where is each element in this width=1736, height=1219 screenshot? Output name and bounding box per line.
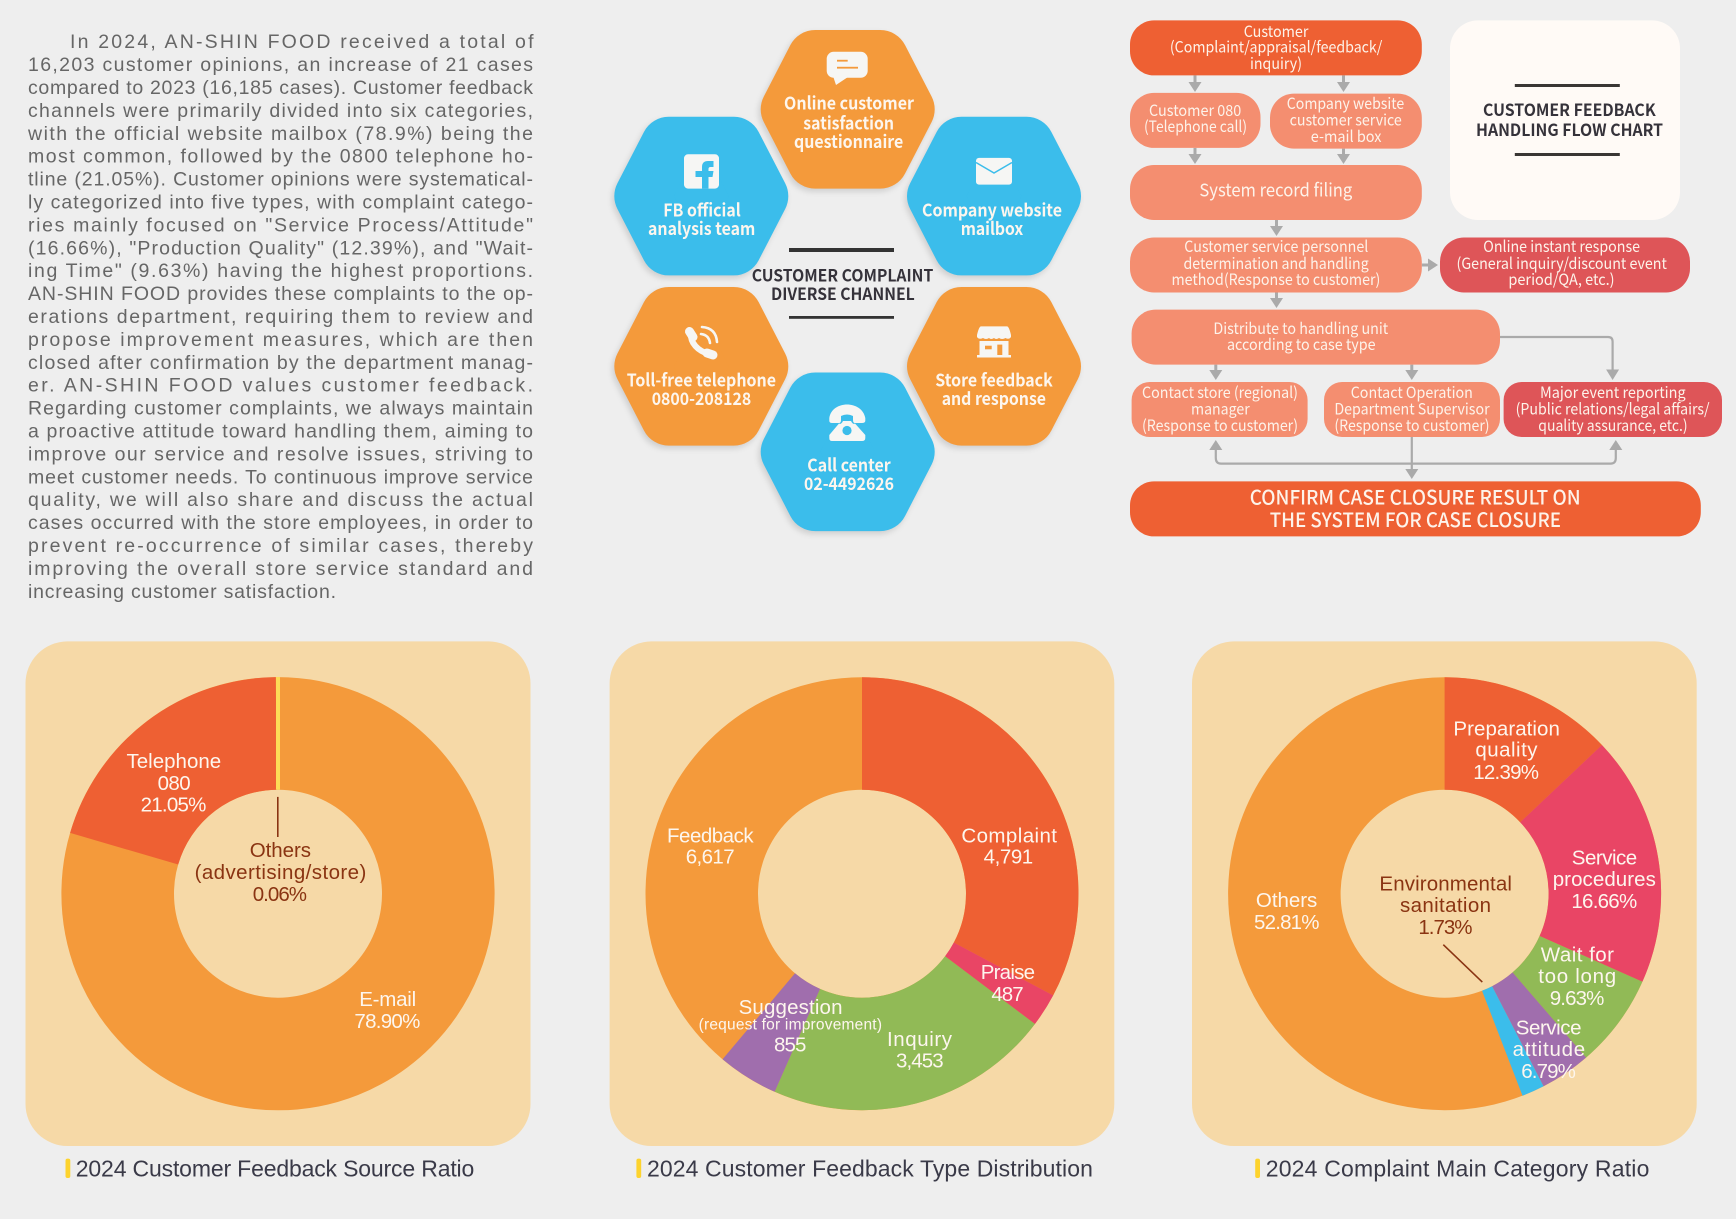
label: e-mail: 78.90% — [354, 1010, 420, 1033]
box: customer service determination — [1130, 235, 1422, 292]
label: environmental sanitation: Environmental — [1379, 872, 1512, 895]
box: company website e-mail: customer service — [1290, 108, 1402, 130]
donut chart: source ratio — [118, 733, 438, 1054]
hexagon: FB official analysis team: FB official — [663, 197, 741, 222]
label: inquiry: 3,453 — [896, 1050, 944, 1073]
heading box: flow chart title: CUSTOMER FEEDBACK — [1483, 97, 1656, 121]
label: feedback: 6,617 — [686, 846, 735, 869]
box: company website e-mail: Company website — [1287, 92, 1404, 114]
label: service procedures: 16.66% — [1571, 890, 1637, 913]
hexagon: store feedback: and response — [942, 386, 1046, 411]
text block: customer opinions summary: cases occurred with the store employees, in order to — [28, 512, 533, 534]
label: service attitude: 6.79% — [1521, 1060, 1576, 1083]
label: others: 52.81% — [1254, 911, 1320, 934]
text block: customer opinions summary: closed after confirmation by the department manag- — [28, 352, 533, 374]
box: contact operation department supervisor: Contact Operation — [1351, 381, 1473, 403]
label: feedback: Feedback — [667, 824, 754, 847]
heading: customer complaint diverse channel: CUSTOMER COMPLAINT — [752, 262, 933, 286]
box: distribute to handling unit — [1132, 310, 1500, 365]
label: others: Others — [250, 839, 311, 862]
label: complaint — [961, 824, 1057, 869]
label: telephone: 080 — [158, 772, 191, 795]
box: customer — [1130, 20, 1422, 75]
text block: customer opinions summary: AN-SHIN FOOD provides these complaints to the op- — [28, 283, 533, 305]
box: online instant response: (General inquiry/discount event — [1456, 252, 1667, 274]
panel: complaint main category ratio — [1192, 641, 1697, 1182]
heading: customer complaint diverse channel — [752, 248, 933, 319]
label: service procedures — [1553, 846, 1656, 913]
text block: customer opinions summary: increasing customer satisfaction. — [28, 581, 336, 603]
label: feedback — [667, 824, 754, 869]
hexagon: call center: Call center — [807, 452, 891, 477]
icon: facebook — [684, 154, 719, 189]
box: customer 080: Customer 080 — [1149, 99, 1241, 121]
box: confirm case closure — [1130, 481, 1701, 536]
label: wait for too long — [1538, 944, 1616, 1010]
text block: customer opinions summary: channels were primarily divided into six categories, — [28, 100, 533, 122]
text block: customer opinions summary: meet customer needs. To continuous improve service — [28, 466, 533, 488]
donut chart: complaint categories — [1284, 733, 1605, 1054]
hexagon: FB official analysis team: analysis team — [648, 216, 755, 241]
panel: customer feedback source ratio — [26, 641, 530, 1182]
hexagon: company website mailbox — [922, 145, 1062, 247]
text block: customer opinions summary: In 2024, AN-SHIN FOOD received a total of — [70, 31, 534, 53]
hexagon: store feedback: Store feedback — [935, 367, 1053, 392]
arrows: flow connectors — [1188, 75, 1622, 479]
label: others — [195, 797, 366, 906]
panel: customer feedback type distribution — [610, 641, 1114, 1182]
hexagon: online questionnaire: satisfaction — [803, 110, 894, 135]
box: company website e-mail: e-mail box — [1311, 125, 1382, 147]
box: system record filing — [1130, 165, 1422, 220]
label: environmental sanitation: 1.73% — [1418, 916, 1472, 939]
box: customer 080 — [1130, 93, 1260, 148]
label: preparation quality: 12.39% — [1473, 761, 1539, 784]
box: customer: Customer — [1244, 20, 1309, 42]
label: others — [1254, 889, 1320, 934]
text block: customer opinions summary: prevent re-occurrence of similar cases, thereby — [28, 535, 533, 557]
icon: chat bubble — [827, 52, 868, 85]
text block: customer opinions summary: most common, followed by the 0800 telephone ho- — [28, 146, 533, 168]
heading box: flow chart title — [1450, 20, 1680, 220]
label: inquiry: Inquiry — [887, 1028, 953, 1051]
box: customer: (Complaint/appraisal/feedback/ — [1170, 36, 1382, 58]
label: preparation quality — [1453, 717, 1560, 784]
box: customer service determination: Customer service personnel — [1184, 235, 1368, 257]
label: suggestion: 855 — [774, 1034, 806, 1057]
label: others: Others — [1256, 889, 1317, 912]
label: service attitude — [1513, 1016, 1585, 1083]
box: major event reporting: Major event reporting — [1540, 381, 1686, 403]
segment: others sliver — [276, 677, 280, 790]
box: confirm case closure: CONFIRM CASE CLOSURE RESULT ON — [1250, 482, 1581, 511]
text block: customer opinions summary: ries mainly focused on "Service Process/Attitude" — [28, 214, 533, 236]
text block: customer opinions summary: tline (21.05%). Customer opinions were systematical- — [28, 169, 533, 191]
text block: customer opinions summary: improving the overall store service standard and — [28, 558, 533, 580]
caption: type distribution: 2024 Customer Feedback Type Distribution — [647, 1156, 1093, 1182]
label: environmental sanitation — [1379, 872, 1512, 982]
label: praise: 487 — [991, 983, 1024, 1006]
label: environmental sanitation: sanitation — [1400, 894, 1491, 917]
hexagon: online questionnaire: questionnaire — [794, 129, 903, 154]
box: contact store manager — [1132, 381, 1308, 437]
box: online instant response: Online instant response — [1483, 235, 1640, 257]
label: e-mail: E-mail — [359, 988, 416, 1011]
text block: customer opinions summary: with the official website mailbox (78.9%) being the — [27, 123, 533, 145]
box: customer 080: (Telephone call) — [1144, 115, 1247, 137]
hexagon: call center: 02-4492626 — [804, 471, 894, 496]
panel: customer feedback handling flow chart — [1130, 20, 1722, 536]
text block: customer opinions summary: erations department, requiring them to review and — [28, 306, 533, 328]
box: contact store manager: manager — [1191, 397, 1251, 419]
text block: customer opinions summary: compared to 2023 (16,185 cases). Customer feedback — [28, 77, 533, 99]
hexagon: online questionnaire — [784, 52, 914, 161]
hexagon: toll-free telephone: 0800-208128 — [652, 386, 751, 411]
box: system record filing: System record filing — [1199, 177, 1352, 203]
text block: customer opinions summary: ing Time" (9.63%) having the highest proportions. — [28, 260, 533, 282]
caption: source ratio: 2024 Customer Feedback Source Ratio — [76, 1156, 474, 1182]
box: customer service determination: method(Response to customer) — [1172, 268, 1380, 290]
icon: desk telephone — [829, 404, 865, 441]
label: telephone — [126, 750, 221, 817]
label: e-mail — [354, 988, 420, 1033]
text block: customer opinions summary: Regarding customer complaints, we always maintain — [28, 398, 533, 420]
panel: customer complaint channels — [627, 52, 1062, 503]
label: telephone: 21.05% — [141, 794, 206, 817]
heading box: flow chart title: HANDLING FLOW CHART — [1476, 117, 1663, 141]
hexagon: toll-free telephone — [627, 315, 776, 418]
text block: customer opinions summary: (16.66%), "Production Quality" (12.39%), and "Wait- — [28, 237, 533, 259]
icon: envelope — [976, 158, 1012, 185]
box: company website e-mail — [1270, 92, 1422, 149]
box: contact operation department supervisor: (Response to customer) — [1334, 414, 1490, 436]
text block: customer opinions summary: improve our service and resolve issues, striving to — [28, 443, 533, 465]
box: confirm case closure: THE SYSTEM FOR CASE CLOSURE — [1270, 504, 1561, 533]
heading: customer complaint diverse channel: DIVERSE CHANNEL — [771, 281, 915, 305]
icon: phone with signal — [690, 327, 717, 355]
text block: customer opinions summary: 16,203 customer opinions, an increase of 21 cases — [28, 54, 533, 76]
hexagon: call center — [789, 400, 907, 503]
text block: customer opinions summary: propose improvement measures, which are then — [28, 329, 533, 351]
text block: customer opinions summary — [27, 31, 534, 603]
label: suggestion: (request for improvement) — [699, 1016, 882, 1034]
label: service procedures: procedures — [1553, 868, 1656, 891]
box: major event reporting: quality assurance, etc.) — [1538, 414, 1688, 436]
label: service attitude: Service — [1516, 1016, 1582, 1039]
label: praise: Praise — [981, 961, 1035, 984]
donut chart: type distribution — [702, 733, 1022, 1054]
box: major event reporting: (Public relations/legal affairs/ — [1516, 397, 1710, 419]
box: contact store manager: Contact store (regional) — [1142, 381, 1298, 403]
label: service attitude: attitude — [1513, 1038, 1585, 1061]
hexagon: company website mailbox: Company website — [922, 197, 1062, 222]
label: wait for too long: too long — [1538, 965, 1616, 988]
label: wait for too long: 9.63% — [1550, 987, 1604, 1010]
box: major event reporting — [1504, 381, 1722, 437]
box: online instant response: period/QA, etc.) — [1508, 268, 1615, 290]
hexagon: company website mailbox: mailbox — [961, 216, 1023, 241]
label: preparation quality: quality — [1475, 739, 1538, 762]
label: service procedures: Service — [1572, 846, 1637, 870]
box: customer service determination: determination and handling — [1184, 252, 1369, 274]
text block: customer opinions summary: quality, we will also share and discuss the actual — [28, 489, 533, 511]
text block: customer opinions summary: ly categorized into five types, with complaint catego- — [28, 192, 533, 214]
label: others: (advertising/store) — [195, 861, 366, 884]
label: suggestion: Suggestion — [739, 996, 842, 1019]
label: telephone: Telephone — [126, 750, 221, 773]
label: praise — [981, 961, 1035, 1006]
label: inquiry — [887, 1028, 953, 1073]
box: distribute to handling unit: according to case type — [1227, 333, 1376, 355]
hexagon: online questionnaire: Online customer — [784, 90, 914, 115]
label: wait for too long: Wait for — [1541, 944, 1614, 966]
label: suggestion — [699, 996, 882, 1057]
label: complaint: Complaint — [961, 824, 1057, 847]
hexagon: FB official analysis team — [642, 145, 760, 247]
box: contact operation department supervisor — [1324, 381, 1500, 437]
label: others: 0.06% — [253, 883, 307, 906]
hexagon: toll-free telephone: Toll-free telephone — [627, 367, 776, 392]
label: complaint: 4,791 — [984, 846, 1033, 869]
box: distribute to handling unit: Distribute to handling unit — [1213, 317, 1388, 339]
hexagon: store feedback — [935, 315, 1053, 418]
box: contact store manager: (Response to customer) — [1142, 414, 1298, 436]
label: preparation quality: Preparation — [1453, 717, 1560, 740]
text block: customer opinions summary: er. AN-SHIN FOOD values customer feedback. — [28, 375, 533, 397]
box: customer: inquiry) — [1250, 52, 1302, 74]
caption: complaint category ratio: 2024 Complaint Main Category Ratio — [1266, 1156, 1649, 1182]
text block: customer opinions summary: a proactive attitude toward handling them, aiming to — [28, 420, 533, 442]
box: online instant response — [1440, 235, 1690, 292]
box: contact operation department supervisor: Department Supervisor — [1334, 397, 1491, 419]
icon: store — [977, 326, 1011, 358]
